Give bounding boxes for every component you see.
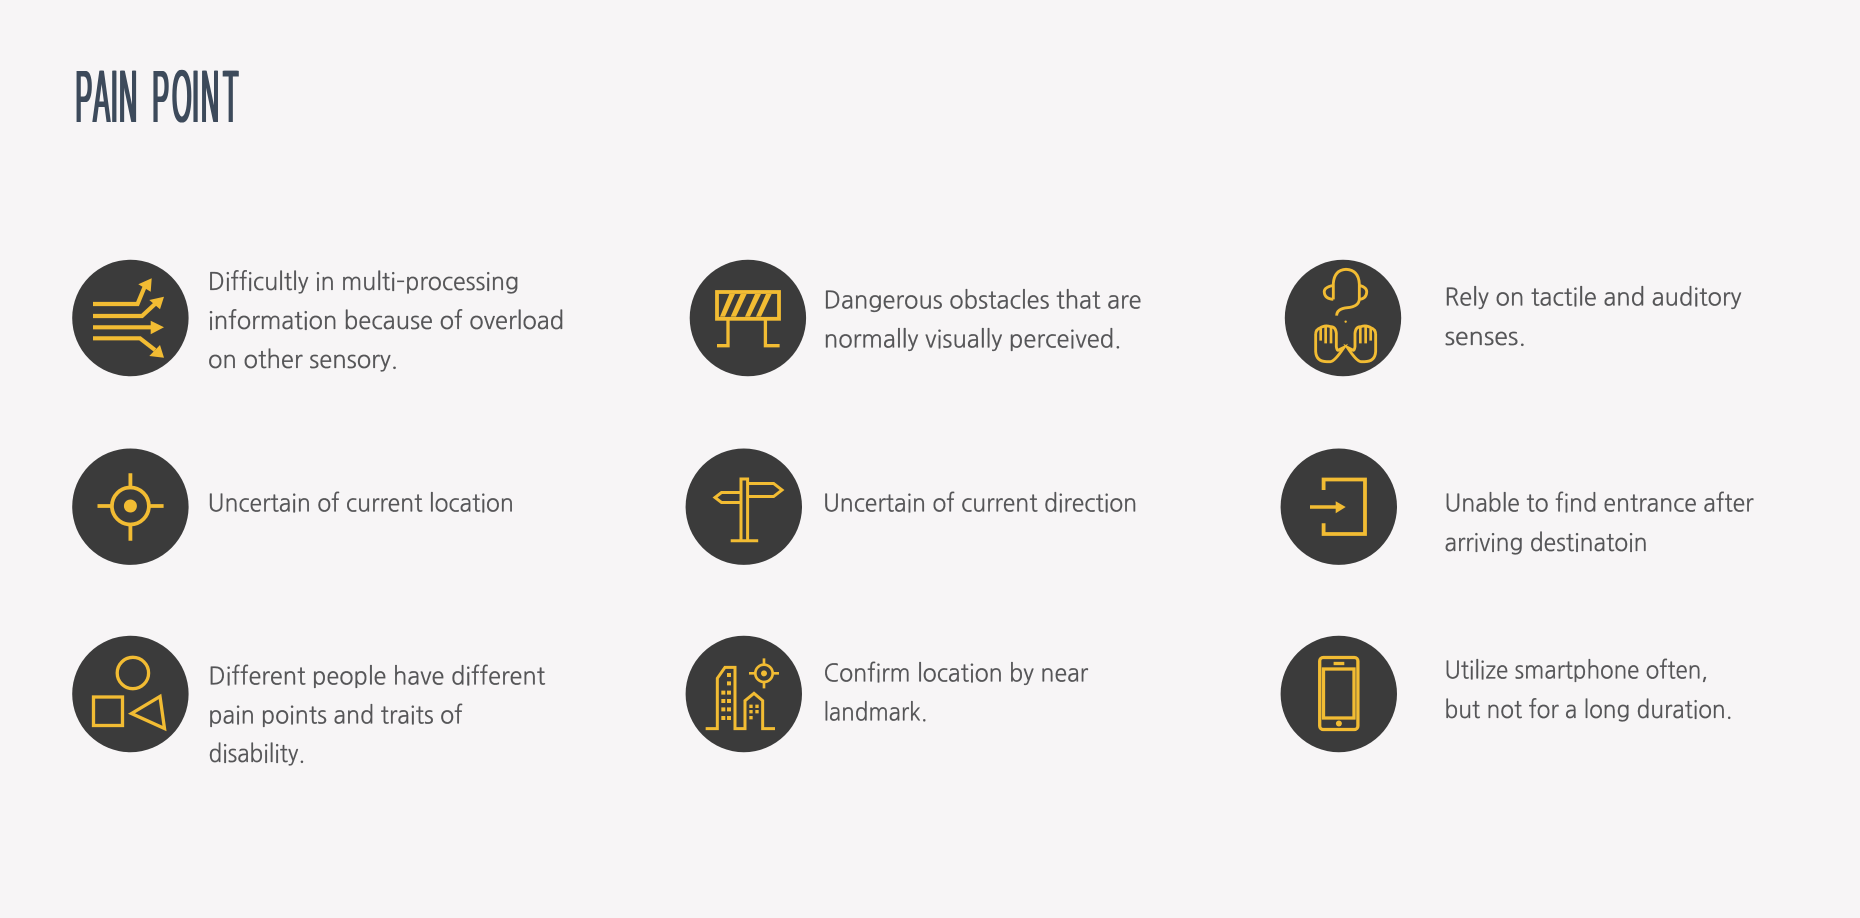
title: T — [223, 55, 238, 138]
title: N — [201, 55, 219, 138]
panel: tactile and auditory — [1285, 260, 1742, 376]
text: overload description: information because of overload — [208, 309, 564, 333]
text: obstacles description: normally visually perceived. — [824, 327, 1121, 351]
text: overload description — [208, 270, 564, 372]
panel: finding the entrance — [1281, 448, 1754, 565]
text: senses description: senses. — [1444, 325, 1526, 349]
text: obstacles description — [824, 288, 1142, 351]
text: direction description: Uncertain of current direction — [823, 492, 1137, 516]
panel: smartphone use — [1281, 636, 1732, 752]
text: entrance description — [1444, 492, 1754, 555]
text: disabilities description: disability. — [208, 742, 305, 766]
text: senses description — [1444, 285, 1742, 349]
icon: diverging arrows — [72, 260, 189, 376]
panel: current location — [72, 448, 514, 565]
text: smartphone description — [1444, 659, 1732, 722]
text: smartphone description: but not for a long duration. — [1444, 698, 1732, 722]
text: smartphone description: Utilize smartphone often, — [1444, 659, 1708, 683]
title: I — [111, 55, 118, 138]
text: senses description: Rely on tactile and auditory — [1444, 285, 1742, 309]
text: obstacles description: Dangerous obstacles that are — [824, 288, 1142, 312]
icon: signpost — [686, 448, 802, 565]
text: overload description: Difficultly in multi–processing — [208, 270, 519, 294]
title — [75, 55, 239, 138]
icon: circle square triangle — [72, 636, 189, 752]
title: P — [75, 55, 92, 138]
text: disabilities description — [208, 664, 545, 766]
panel: dangerous obstacles — [690, 260, 1142, 376]
title: P — [152, 55, 169, 138]
title: N — [119, 55, 137, 138]
panel: nearby landmark — [686, 636, 1088, 752]
icon: smartphone — [1281, 636, 1397, 752]
icon: road barricade — [690, 260, 806, 376]
text: entrance description: arriving destinatoin — [1444, 531, 1648, 555]
text: location description: Uncertain of current location — [208, 492, 514, 516]
text: disabilities description: pain points and traits of — [208, 703, 463, 727]
text: entrance description: Unable to find entrance after — [1444, 492, 1754, 516]
text: overload description: on other sensory. — [208, 348, 398, 372]
title: A — [93, 55, 110, 138]
panel: multi-processing overload — [72, 260, 564, 376]
text: landmark description — [824, 662, 1088, 725]
icon: door entrance arrow — [1281, 448, 1397, 565]
text: disabilities description: Different people have different — [208, 664, 545, 688]
panel: different disabilities — [72, 636, 545, 766]
text: landmark description: Confirm location by near — [824, 662, 1088, 686]
title: I — [192, 55, 199, 138]
icon: location crosshair — [72, 448, 189, 565]
panel: current direction — [686, 448, 1137, 565]
icon: headset and hands — [1285, 260, 1401, 376]
icon: buildings and location — [686, 636, 802, 752]
text: landmark description: landmark. — [824, 701, 928, 725]
title: O — [172, 55, 192, 138]
